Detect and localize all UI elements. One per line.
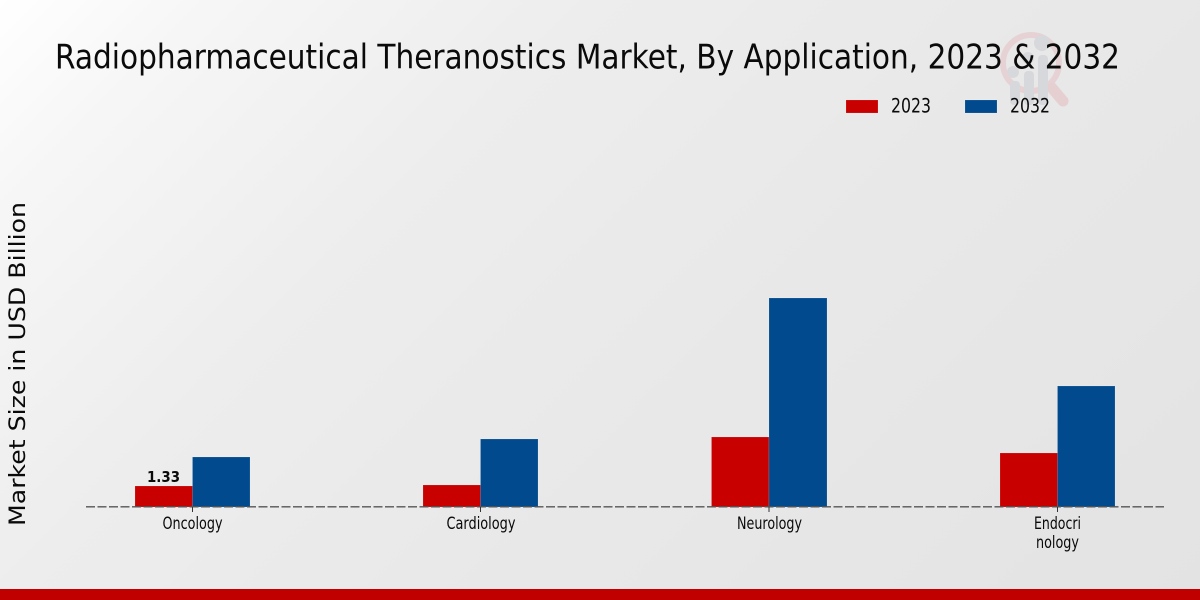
- bars: Neurology: [712, 298, 827, 507]
- legend: 2032 label: 2032: [1010, 94, 1050, 118]
- bars: Oncology: [135, 457, 250, 507]
- category label: Endocrinology: nology: [1036, 533, 1079, 552]
- legend: 2023 label: 2023: [891, 94, 931, 118]
- bar chart: [86, 298, 1164, 512]
- legend: 2023 swatch: [846, 100, 878, 113]
- category label: Endocrinology: Endocri: [1034, 514, 1081, 533]
- bars: Endocrinology: [1000, 386, 1115, 507]
- category label: Endocrinology: [1034, 514, 1081, 552]
- category label: Cardiology: Cardiology: [446, 514, 516, 533]
- category label: Neurology: Neurology: [737, 514, 802, 533]
- bars: Cardiology: [423, 439, 538, 507]
- legend: 2032 swatch: [965, 100, 997, 113]
- icon: watermark logo: [1003, 35, 1063, 105]
- value label: 1.33: 1.33: [147, 468, 180, 486]
- legend: [846, 94, 1050, 118]
- category label: Oncology: Oncology: [162, 514, 223, 533]
- y axis title: Market Size in USD Billion: [5, 202, 31, 526]
- footer bar: [0, 589, 1200, 600]
